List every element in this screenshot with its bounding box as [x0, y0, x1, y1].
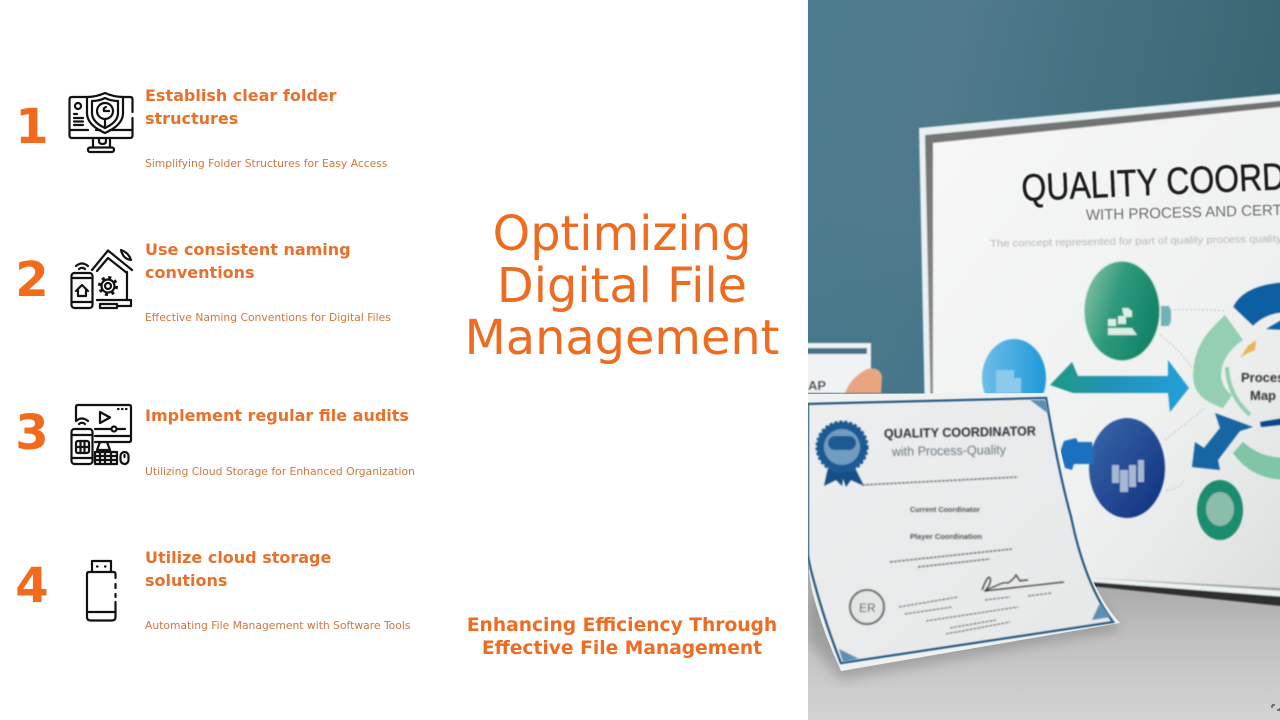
title	[465, 207, 779, 366]
corner mark	[1272, 705, 1280, 711]
icon: smart home with phone	[70, 248, 134, 310]
small card with hand	[800, 343, 882, 393]
step 4 heading: Utilize cloud storage	[145, 548, 331, 567]
step 4 heading	[145, 548, 331, 590]
subtitle: Effective File Management	[482, 638, 762, 659]
step 2 heading: Use consistent naming	[145, 240, 351, 259]
icon: monitor, phone and keyboard	[70, 404, 132, 466]
certificate: QUALITY COORDINATOR	[884, 423, 1037, 441]
icon: monitor with shield	[68, 92, 134, 154]
title: Management	[465, 311, 779, 366]
step 1 heading	[145, 86, 337, 128]
table	[808, 570, 1280, 720]
certificate shadow	[808, 600, 1120, 680]
step 2 number: 2	[15, 252, 49, 308]
title: Optimizing	[493, 207, 751, 262]
board diagram	[982, 261, 1280, 540]
subtitle: Enhancing Efficiency Through	[467, 615, 777, 636]
certificate: with Process-Quality	[891, 442, 1007, 459]
board heading: WITH PROCESS AND CERT	[1086, 202, 1280, 224]
step 2 description: Effective Naming Conventions for Digital Files	[145, 311, 391, 324]
step 1 heading: Establish clear folder	[145, 86, 337, 105]
step 1 description: Simplifying Folder Structures for Easy Access	[145, 157, 388, 170]
board diagram: Map	[1250, 388, 1276, 403]
certificate: Player Coordination	[910, 534, 982, 541]
step 3 description: Utilizing Cloud Storage for Enhanced Organization	[145, 465, 415, 478]
certificate: ER	[859, 601, 876, 615]
step 1 heading: structures	[145, 109, 238, 128]
step 2 heading: conventions	[145, 263, 255, 282]
certificate	[808, 393, 1120, 671]
step 1 number: 1	[15, 99, 49, 155]
step 4 heading: solutions	[145, 571, 227, 590]
board	[919, 92, 1280, 608]
wall	[808, 0, 1280, 720]
step 4 number: 4	[15, 558, 49, 614]
certificate: Current Coordinator	[910, 507, 980, 514]
title: Digital File	[497, 259, 747, 314]
step 2 heading	[145, 240, 351, 282]
subtitle	[467, 615, 777, 659]
icon: USB drive	[86, 560, 117, 622]
board faint caption: The concept represented for part of quality process quality	[990, 234, 1280, 250]
photo: quality coordinator board and certificate	[808, 0, 1280, 720]
step 4 description: Automating File Management with Software Tools	[145, 619, 410, 632]
step 3 heading: Implement regular file audits	[145, 406, 409, 425]
small card with hand: AP	[808, 378, 826, 393]
step 3 number: 3	[15, 405, 49, 461]
